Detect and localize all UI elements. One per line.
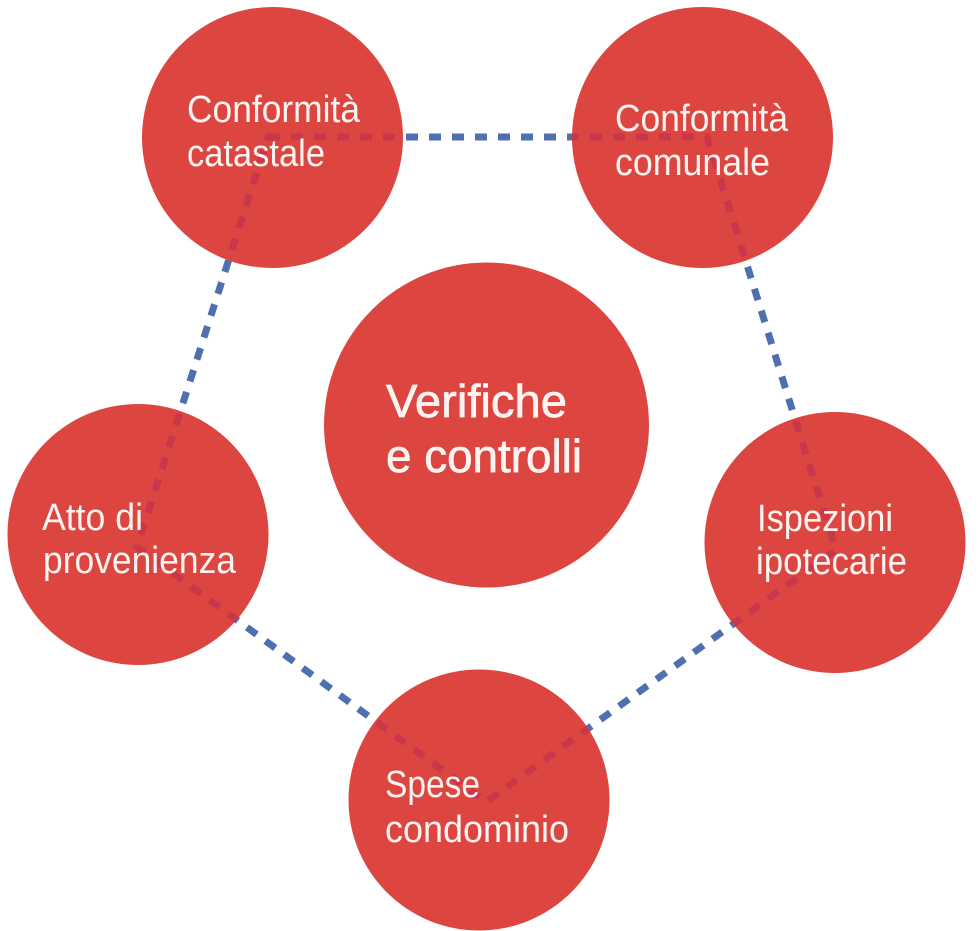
circle: centre: [324, 262, 649, 588]
circle: Conformità catastale: [142, 7, 403, 268]
circle: Atto di provenienza: provenienza: [43, 540, 237, 582]
circle: Atto di provenienza: Atto di: [42, 497, 143, 539]
circle: Ispezioni ipotecarie: ipotecarie: [756, 541, 907, 583]
dashed pentagon connector: [137, 137, 836, 802]
circle: Conformità catastale: Conformità: [187, 89, 361, 131]
circle: Ispezioni ipotecarie: [704, 412, 966, 673]
circle: Conformità comunale: [572, 7, 833, 268]
circle: Spese condominio: [348, 670, 610, 930]
text: Verifiche e controlli: Verifiche: [386, 375, 567, 427]
circle: Ispezioni ipotecarie: Ispezioni: [757, 498, 893, 540]
text: Verifiche e controlli: [386, 375, 582, 482]
circle: Conformità comunale: comunale: [615, 142, 770, 184]
circle: Spese condominio: Spese: [385, 764, 480, 806]
text: Verifiche e controlli: e controlli: [386, 430, 582, 482]
circle: Spese condominio: condominio: [385, 809, 569, 851]
circle: Conformità comunale: Conformità: [615, 98, 789, 140]
circle: Conformità catastale: catastale: [187, 133, 325, 175]
circle: Atto di provenienza: [8, 404, 268, 665]
